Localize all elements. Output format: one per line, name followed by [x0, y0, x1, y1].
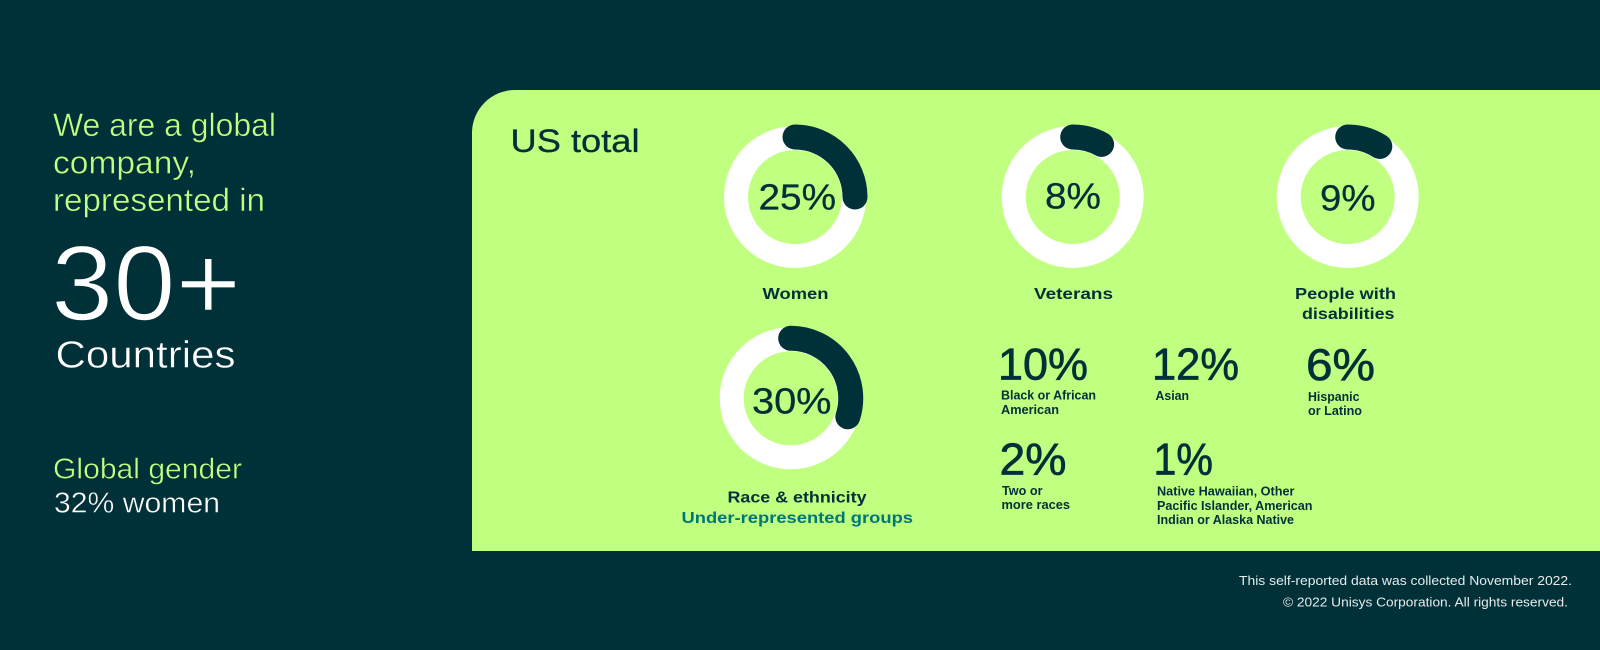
- donut: race and ethnicity 30%: [682, 338, 913, 527]
- donut: veterans 8%: [1014, 137, 1132, 303]
- stat: Hispanic or Latino 6%: [1306, 341, 1375, 418]
- stat: Hispanic or Latino 6%: or Latino: [1308, 404, 1362, 418]
- intro statement: represented in: [53, 182, 265, 218]
- panel background: [472, 90, 1600, 551]
- donut: veterans 8%: Veterans: [1034, 286, 1113, 303]
- stat: Black or African American 10%: Black or African: [1001, 388, 1096, 402]
- stat: Black or African American 10%: 10%: [998, 340, 1088, 390]
- intro statement: company,: [53, 144, 196, 180]
- intro statement: [53, 107, 276, 218]
- stat: Hispanic or Latino 6%: Hispanic: [1308, 390, 1360, 404]
- stat: Native Hawaiian and others 1%: Native Hawaiian, Other: [1157, 484, 1295, 498]
- stat: Hispanic or Latino 6%: 6%: [1306, 341, 1375, 390]
- donut: people with disabilities 9%: 9%: [1320, 178, 1376, 218]
- donut: race and ethnicity 30%: Under-represented groups: [682, 510, 913, 527]
- donut: people with disabilities 9%: disabilities: [1302, 306, 1395, 323]
- stat: Native Hawaiian and others 1%: Pacific Islander, American: [1157, 499, 1312, 513]
- stat: two or more races 2%: [1000, 436, 1070, 512]
- big stat: 30+: 30+: [51, 223, 241, 343]
- stat: Native Hawaiian and others 1%: 1%: [1154, 436, 1213, 484]
- donut: race and ethnicity 30%: Race & ethnicity: [728, 490, 867, 506]
- footnote: This self-reported data was collected November 2022.: [1239, 573, 1572, 588]
- stat: Asian 12%: 12%: [1152, 340, 1239, 390]
- donut: women 25%: [736, 137, 855, 303]
- stat: two or more races 2%: more races: [1002, 498, 1070, 512]
- footnote: [1239, 573, 1572, 610]
- global gender stat: [53, 454, 242, 520]
- stat: Black or African American 10%: American: [1001, 403, 1059, 417]
- stat: two or more races 2%: 2%: [1000, 436, 1066, 484]
- stat: Native Hawaiian and others 1%: Indian or Alaska Native: [1157, 513, 1294, 527]
- stat: Asian 12%: Asian: [1156, 389, 1189, 403]
- intro text block: [51, 107, 276, 376]
- global gender stat: Global gender: [53, 454, 242, 486]
- donut: women 25%: Women: [762, 286, 828, 303]
- stat: Black or African American 10%: [998, 340, 1096, 417]
- donut: veterans 8%: 8%: [1045, 176, 1101, 216]
- donut: race and ethnicity 30%: 30%: [752, 380, 832, 422]
- panel: US total: [472, 90, 1600, 551]
- countries label: Countries: [56, 334, 236, 376]
- stat: Native Hawaiian and others 1%: [1154, 436, 1312, 527]
- global gender stat: 32% women: [54, 488, 220, 520]
- donut: people with disabilities 9%: People with: [1295, 286, 1396, 303]
- panel heading: US total: [510, 123, 640, 159]
- stat: two or more races 2%: Two or: [1002, 484, 1043, 498]
- footnote: © 2022 Unisys Corporation. All rights reserved.: [1283, 594, 1568, 610]
- donut: women 25%: 25%: [758, 176, 836, 218]
- intro statement: We are a global: [53, 107, 276, 143]
- donut: people with disabilities 9%: [1289, 137, 1407, 323]
